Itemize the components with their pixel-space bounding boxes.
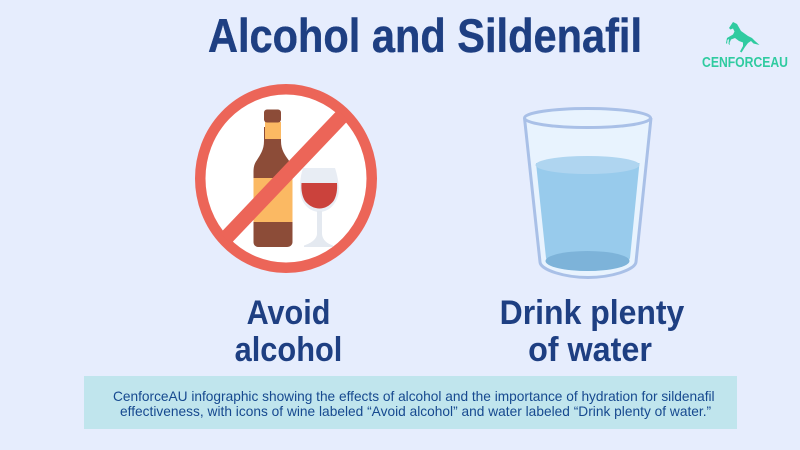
title: Alcohol and Sildenafil (208, 9, 641, 62)
caption text: CenforceAU infographic showing the effects of alcohol and the importance of hydration for sildenafil (113, 389, 715, 404)
label: drink plenty of water: Drink plenty (500, 294, 684, 332)
caption box (84, 376, 737, 429)
label: drink plenty of water: of water (528, 331, 651, 369)
caption text (113, 389, 715, 419)
icon: bottle (254, 110, 292, 247)
icon: wine glass (300, 168, 339, 247)
label: drink plenty of water (500, 294, 684, 369)
label: avoid alcohol: Avoid (247, 294, 330, 332)
logo text: CENFORCEAU (702, 55, 787, 71)
label: avoid alcohol (235, 294, 342, 369)
caption text: effectiveness, with icons of wine labeled “Avoid alcohol” and water labeled “Drink plenty of water.” (120, 404, 711, 419)
label: avoid alcohol: alcohol (235, 331, 342, 369)
